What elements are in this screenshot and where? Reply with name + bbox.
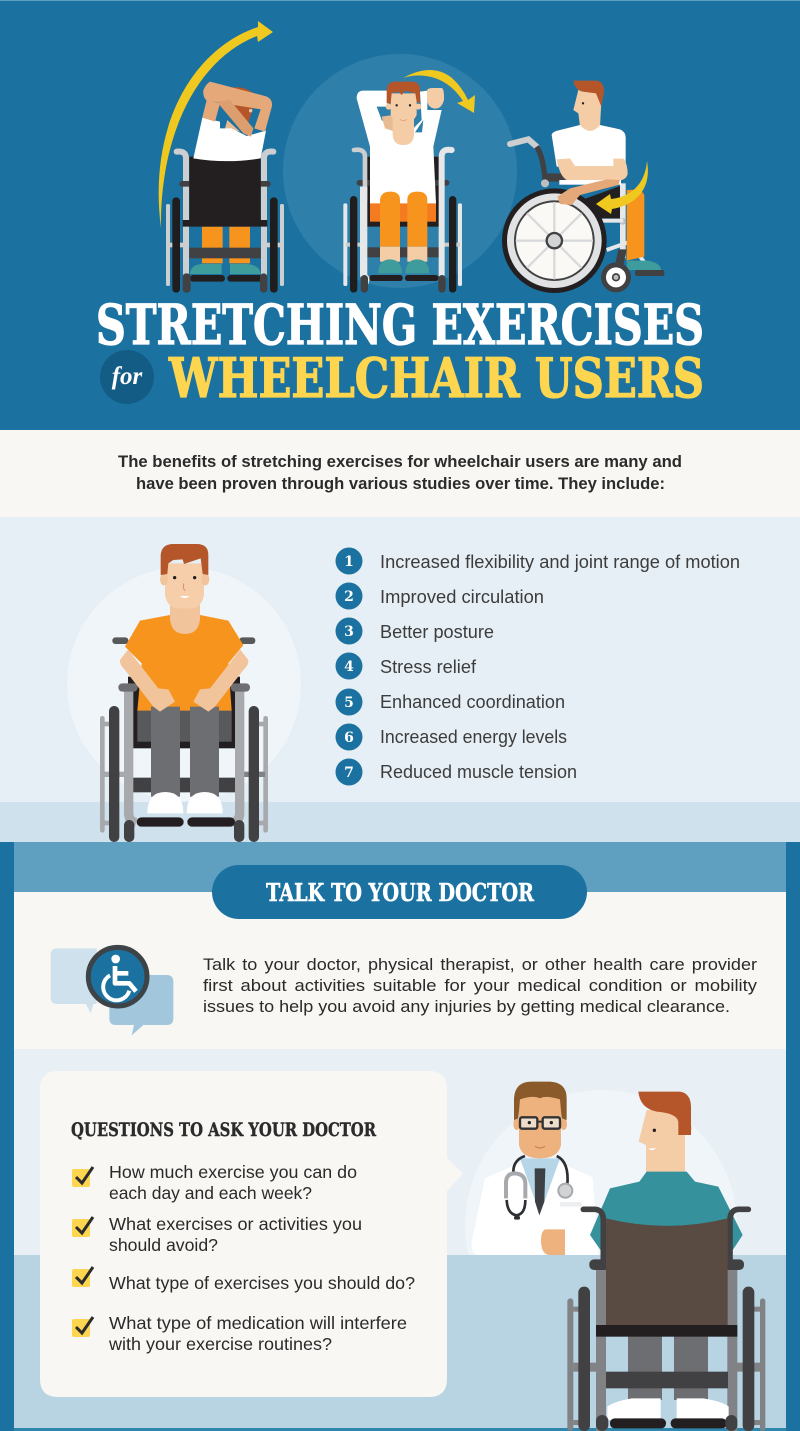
- arrow: yellow arc to the right: [403, 70, 475, 113]
- heading pill: talk to your doctor: TALK TO YOUR DOCTOR: [266, 878, 535, 907]
- big wheel: [502, 188, 607, 293]
- question 2: [72, 1214, 362, 1255]
- heading pill: talk to your doctor: [212, 865, 587, 919]
- intro panel: [0, 430, 800, 517]
- item 5: [336, 688, 565, 716]
- header panel: [0, 0, 800, 430]
- item 5: 5: [344, 695, 354, 711]
- item 4: [336, 652, 477, 680]
- benefits panel: [0, 517, 800, 842]
- title: [96, 292, 704, 410]
- question 4: What type of medication will interfere: [109, 1313, 407, 1333]
- shirt: [193, 118, 266, 161]
- doctor advice paragraph: first about activities suitable for your medical condition or mobility: [203, 976, 758, 995]
- item 5: Enhanced coordination: [380, 692, 565, 712]
- item 4: Stress relief: [380, 657, 477, 677]
- item 7: 7: [344, 765, 354, 781]
- hair: [228, 87, 253, 128]
- figure: arms behind head stretch: [343, 82, 462, 293]
- figure: patient from behind in wheelchair: [567, 1092, 765, 1431]
- question 1: How much exercise you can do: [109, 1162, 357, 1182]
- figure: overhead side stretch from behind: [166, 82, 284, 293]
- doctor advice paragraph: issues to help you avoid any injuries by getting medical clearance.: [203, 997, 730, 1016]
- item 2: 2: [344, 589, 354, 605]
- question 2: What exercises or activities you: [109, 1214, 362, 1234]
- item 7: [336, 758, 577, 786]
- item 3: 3: [344, 624, 354, 640]
- item 6: 6: [344, 730, 354, 746]
- intro panel: have been proven through various studies over time. They include:: [136, 474, 665, 493]
- item 1: [336, 548, 740, 574]
- question 2: should avoid?: [109, 1235, 218, 1255]
- arms: [202, 100, 220, 122]
- patient head: [639, 1110, 685, 1177]
- question 1: each day and each week?: [109, 1183, 312, 1203]
- icon: speech bubbles with wheelchair symbol: [51, 947, 173, 1035]
- badge: for: [100, 350, 154, 404]
- head: [170, 603, 200, 634]
- doctor hand: [541, 1229, 565, 1255]
- benefits list: [336, 548, 740, 786]
- doctor advice paragraph: Talk to your doctor, physical therapist, or other health care provider: [203, 955, 757, 974]
- arms: [120, 649, 175, 712]
- caster wheel: [613, 249, 627, 273]
- question 3: What type of exercises you should do?: [109, 1273, 415, 1293]
- item 2: Improved circulation: [380, 587, 544, 607]
- question 3: [72, 1267, 415, 1293]
- doctor section backgrounds: [0, 842, 800, 1431]
- badge: for: for: [112, 363, 143, 390]
- item 6: Increased energy levels: [380, 727, 567, 747]
- arrow: yellow curved pointing back: [596, 161, 648, 214]
- item 1: Increased flexibility and joint range of motion: [380, 552, 740, 572]
- panel: questions to ask your doctor: [40, 1071, 463, 1397]
- orange shirt: [125, 615, 243, 711]
- item 4: 4: [344, 659, 354, 675]
- figure: doctor: [472, 1082, 598, 1255]
- benefits background circle: [67, 567, 301, 801]
- stethoscope: [513, 1156, 568, 1185]
- question 1: [72, 1162, 357, 1203]
- header background circle: [283, 54, 517, 288]
- shirt and raised arms: [357, 91, 442, 203]
- item 1: 1: [344, 554, 354, 570]
- card heading: QUESTIONS TO ASK YOUR DOCTOR: [71, 1119, 376, 1141]
- question 4: [72, 1313, 407, 1354]
- torso and head: [573, 90, 602, 132]
- item 6: [336, 724, 567, 750]
- item 3: Better posture: [380, 622, 494, 642]
- item 2: [336, 582, 544, 610]
- item 7: Reduced muscle tension: [380, 762, 577, 782]
- figure: man in orange shirt facing forward: [100, 544, 268, 842]
- arrow: curved yellow up: [159, 21, 273, 228]
- item 3: [336, 618, 494, 644]
- figure: side view torso twist: [502, 81, 664, 293]
- question 4: with your exercise routines?: [108, 1334, 332, 1354]
- doctor advice paragraph: [203, 955, 758, 1016]
- intro panel: The benefits of stretching exercises for wheelchair users are many and: [118, 452, 682, 471]
- teal shirt: [590, 1172, 743, 1267]
